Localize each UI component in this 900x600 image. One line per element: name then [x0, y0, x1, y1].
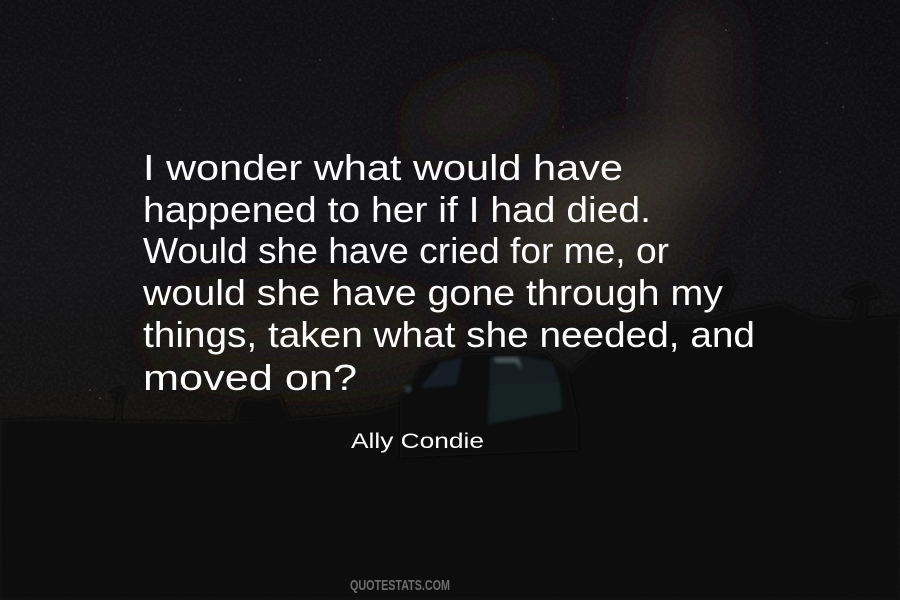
background: stars	[89, 18, 844, 399]
quote text: things, taken what she needed, and	[143, 314, 755, 355]
background: dark horizon, hills and trees	[0, 268, 900, 600]
source watermark: QUOTESTATS.COM	[350, 577, 450, 594]
author name: Ally Condie	[351, 430, 484, 453]
quote text: I wonder what would have	[143, 147, 623, 188]
quote text	[142, 147, 755, 398]
car rear panel	[488, 383, 562, 424]
quote text: Would she have cried for me, or	[143, 230, 669, 271]
quote text: moved on?	[143, 357, 357, 398]
car windows	[420, 358, 462, 388]
quote text: would she have gone through my	[142, 272, 723, 313]
car silhouette	[400, 352, 578, 458]
quote text: happened to her if I had died.	[143, 189, 651, 230]
